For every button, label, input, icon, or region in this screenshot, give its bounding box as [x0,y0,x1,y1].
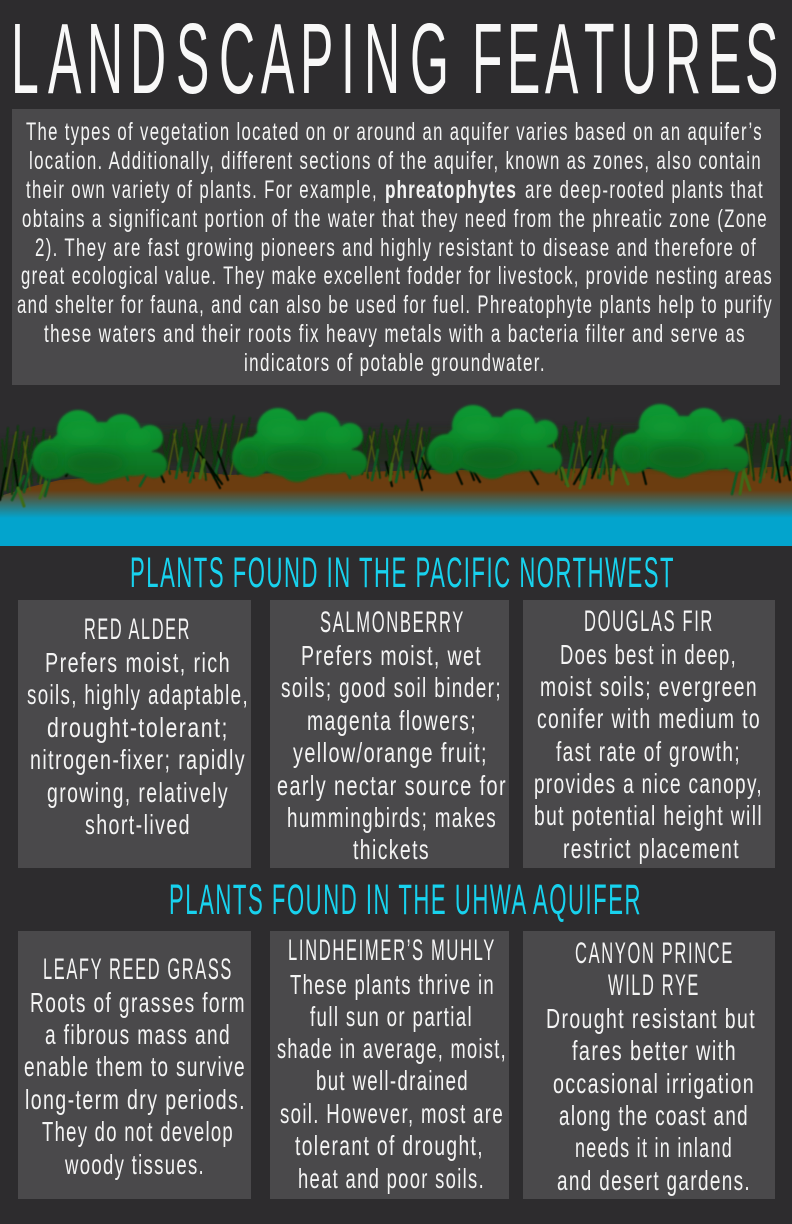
card: Red Alder: nitrogen-fixer; rapidly [30,744,246,775]
soil and water band [0,466,792,546]
shrub 4 [614,404,749,478]
card: Lindheimer's Muhly: tolerant of drought, [295,1130,484,1161]
shrub 2 [232,408,367,482]
grass mass [0,428,792,490]
intro panel: their own variety of plants. For example, [26,176,378,204]
card: Lindheimer's Muhly: LINDHEIMER’S MUHLY [288,934,496,967]
card: Leafy Reed Grass: a fibrous mass and [45,1019,231,1050]
card: Leafy Reed Grass: Roots of grasses form [30,987,246,1018]
card: Salmonberry: magenta flowers; [307,705,477,736]
card: Canyon Prince Wild Rye: WILD RYE [608,969,700,1002]
card: Salmonberry: soils; good soil binder; [281,672,502,703]
card: Canyon Prince Wild Rye [523,931,775,1199]
card: Red Alder: drought-tolerant; [47,712,229,743]
card: Salmonberry: hummingbirds; makes [287,802,497,833]
intro panel: indicators of potable groundwater. [244,349,546,377]
card: Leafy Reed Grass: long-term dry periods. [25,1084,246,1115]
intro panel [12,109,780,385]
card: Salmonberry: thickets [353,834,430,865]
card: Leafy Reed Grass: woody tissues. [64,1149,205,1180]
card: Salmonberry: early nectar source for [277,770,507,801]
card: Red Alder: short-lived [85,809,191,840]
card: Leafy Reed Grass: They do not develop [42,1116,234,1147]
card: Red Alder: growing, relatively [47,777,229,808]
shrub 1 [32,410,167,484]
card: Salmonberry: Prefers moist, wet [301,640,482,671]
card: Lindheimer's Muhly [270,931,509,1199]
card: Lindheimer's Muhly: shade in average, moist, [277,1033,507,1064]
grass [0,416,790,506]
card: Salmonberry [270,600,509,868]
title: LANDSCAPING FEATURES [11,2,778,115]
card: Leafy Reed Grass [18,931,251,1199]
card: Red Alder: soils, highly adaptable, [27,679,249,710]
card: Lindheimer's Muhly: heat and poor soils. [298,1163,485,1194]
illustration: plants, soil and water [0,404,792,546]
card: Leafy Reed Grass: LEAFY REED GRASS [43,953,233,986]
card: Lindheimer's Muhly: full sun or partial [310,1001,473,1032]
card: Leafy Reed Grass: enable them to survive [24,1051,246,1082]
card: Lindheimer's Muhly: soil. However, most are [280,1098,504,1129]
shrub 3 [427,405,562,479]
card: Salmonberry: SALMONBERRY [320,606,465,639]
card: Red Alder: Prefers moist, rich [45,647,231,678]
card: Lindheimer's Muhly: but well-drained [316,1065,469,1096]
card: Red Alder: RED ALDER [84,613,191,646]
card: Red Alder [18,600,251,868]
card: Salmonberry: yellow/orange fruit; [293,737,488,768]
bold term: phreatophytes: phreatophytes [385,176,517,204]
card: Douglas Fir [523,600,775,868]
card: Lindheimer's Muhly: These plants thrive in [290,969,495,1000]
